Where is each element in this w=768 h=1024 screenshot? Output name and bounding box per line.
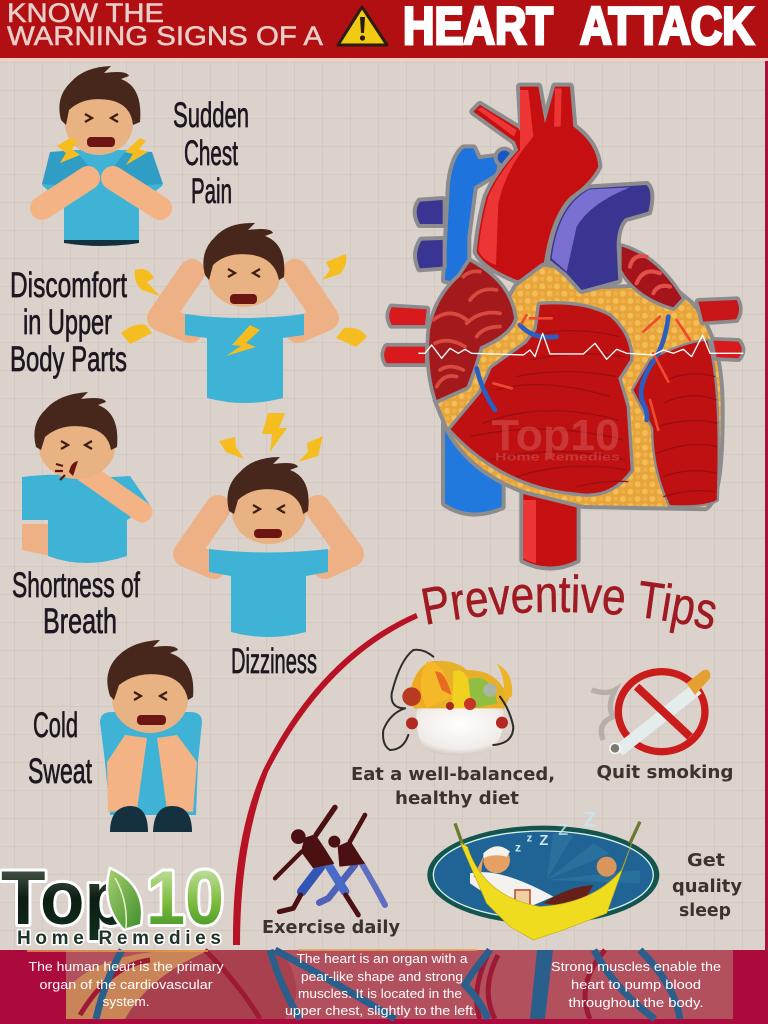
caption: pear-like shape: upper chest, slightly to the left. — [285, 1003, 477, 1018]
icon: man in hammock: Z — [558, 822, 568, 839]
aorta — [473, 87, 598, 280]
caption: pear-like shape: The heart is an organ with a — [296, 951, 468, 966]
label: discomfort in upper body parts: in Upper — [23, 303, 112, 342]
label: quit smoking: Quit smoking — [596, 762, 734, 783]
illustration: anatomical heart — [384, 87, 743, 567]
header banner — [0, 0, 768, 61]
label: discomfort in upper body parts: Discomfort — [10, 266, 127, 305]
tip: quit smoking — [592, 670, 734, 783]
caption: strong muscles: Strong muscles enable the — [551, 959, 721, 974]
person: cold sweat — [100, 640, 202, 832]
tip: healthy diet — [351, 650, 555, 785]
right ventricle — [633, 341, 718, 505]
heading: heart attack — [403, 0, 754, 56]
hammock cloth — [461, 843, 632, 940]
label: dizziness: Dizziness — [231, 642, 317, 681]
caption: pear-like shape: muscles. It is located in the — [298, 986, 462, 1001]
label: get quality sleep: sleep — [679, 900, 731, 921]
icon: dizzy bolts — [219, 413, 323, 462]
ECG pulse line — [418, 333, 743, 359]
tip: quality sleep — [427, 808, 742, 940]
person: dizziness — [186, 413, 351, 637]
side arteries — [384, 300, 742, 363]
watermark: Home Remedies — [495, 452, 620, 464]
left lower chamber — [429, 262, 514, 400]
label: discomfort in upper body parts — [10, 266, 127, 379]
right upper chamber — [622, 247, 682, 307]
label: get quality sleep: Get — [687, 850, 725, 871]
label: sudden chest pain — [173, 96, 249, 211]
icon: man in hammock — [427, 808, 659, 940]
caption: pear-like shape: pear-like shape and strong — [301, 969, 463, 984]
icon: man in hammock: z — [515, 841, 521, 855]
icon: warning triangle — [338, 7, 387, 45]
pulmonary veins — [417, 200, 443, 268]
silhouette with fat layer — [437, 267, 721, 507]
footer band — [0, 950, 768, 1024]
label: sudden chest pain: Chest — [184, 134, 238, 173]
label: cold sweat: Cold — [33, 706, 78, 745]
icon: man in hammock: Z — [539, 833, 548, 849]
tip: exercise daily — [262, 807, 400, 938]
illustration: heart tissue panel — [66, 950, 733, 1019]
label: cold sweat — [28, 706, 92, 791]
descending vessels — [445, 423, 577, 567]
label: get quality sleep — [672, 850, 742, 921]
label: sudden chest pain: Sudden — [173, 96, 249, 135]
pulmonary artery — [550, 185, 650, 290]
person: sudden chest pain — [42, 66, 163, 246]
label: sudden chest pain: Pain — [191, 172, 232, 211]
label: eat a well-balanced, healthy diet: Eat a well-balanced, — [351, 764, 555, 785]
label: shortness of breath: Breath — [43, 602, 117, 641]
label: get quality sleep: quality — [672, 876, 742, 897]
caption: pear-like shape — [285, 951, 477, 1018]
label: exercise daily: Exercise daily — [262, 917, 400, 938]
label: healthy diet: healthy diet — [395, 788, 519, 809]
logo: top 10 home remedies: 10 — [146, 856, 224, 941]
icon: man in hammock: Z — [583, 808, 596, 832]
icon: no smoking sign — [592, 670, 710, 755]
person: shortness of breath — [22, 392, 150, 563]
caption: strong muscles: throughout the body. — [568, 995, 704, 1010]
figure: back — [319, 815, 385, 905]
person: discomfort in upper body — [121, 223, 367, 403]
icon: fruit bowl with stethoscope — [383, 650, 513, 755]
watermark: Top10 — [492, 412, 620, 460]
icon: two stretching figures — [275, 807, 385, 915]
caption: primary organ: system. — [102, 994, 150, 1009]
label: discomfort in upper body parts: Body Parts — [10, 340, 127, 379]
heading: know the warning signs: WARNING SIGNS OF A — [7, 21, 323, 51]
heading: know the warning signs — [7, 0, 323, 51]
caption: strong muscles — [551, 959, 721, 1010]
caption: strong muscles: heart to pump blood — [571, 977, 701, 992]
superior vena cava — [445, 148, 498, 283]
caption: primary organ — [28, 959, 224, 1009]
logo: top 10 home remedies — [1, 856, 224, 949]
coronary vessels — [477, 315, 690, 430]
heading: preventive tips: Preventive Tips — [422, 574, 716, 634]
figure: front — [275, 807, 358, 915]
curved red divider — [233, 613, 418, 945]
logo: top 10 home remedies: Home Remedies — [17, 928, 221, 949]
logo: top 10 home remedies: Top — [1, 856, 129, 941]
caption: primary organ: organ of the cardiovascular — [40, 977, 213, 992]
label: shortness of breath: Shortness of — [12, 566, 140, 605]
label: cold sweat: Sweat — [28, 752, 92, 791]
accent rules — [27, 950, 477, 951]
caption: primary organ: The human heart is the primary — [28, 959, 224, 974]
central ventricle — [451, 304, 631, 494]
icon: man in hammock: z — [527, 833, 533, 845]
label: shortness of breath — [12, 566, 140, 641]
